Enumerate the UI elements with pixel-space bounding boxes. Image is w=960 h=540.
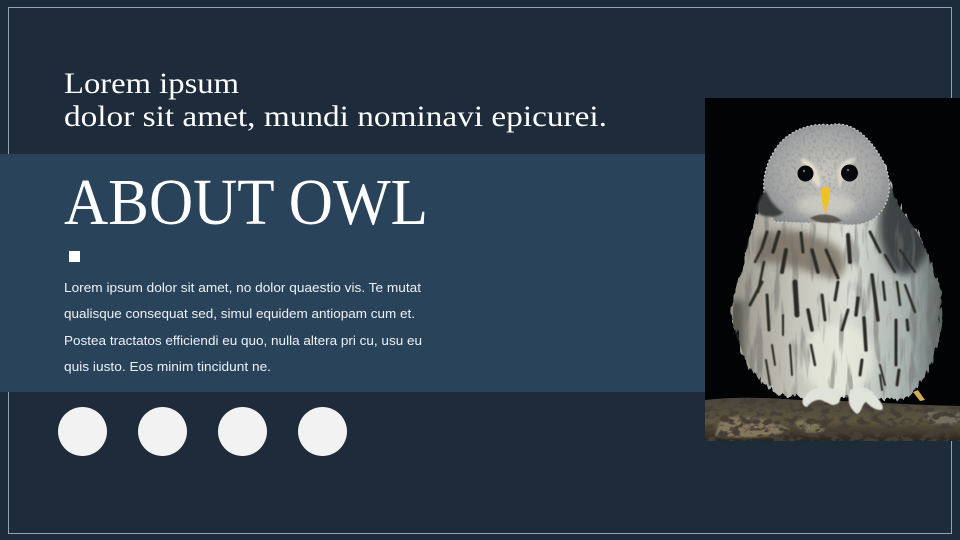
body text xyxy=(64,280,422,374)
icon placeholder circles xyxy=(58,407,347,456)
owl beak xyxy=(821,187,830,213)
owl eyes xyxy=(798,166,814,182)
title: ABOUT OWL xyxy=(64,166,428,239)
subtitle: dolor sit amet, mundi nominavi epicurei. xyxy=(64,100,607,133)
body text: quis iusto. Eos minim tincidunt ne. xyxy=(64,359,271,374)
body text: Postea tractatos efficiendi eu quo, nulla altera pri cu, usu eu xyxy=(64,333,422,348)
body text: qualisque consequat sed, simul equidem antiopam cum et. xyxy=(64,306,415,321)
owl body xyxy=(733,165,942,399)
body text: Lorem ipsum dolor sit amet, no dolor quaestio vis. Te mutat xyxy=(64,280,421,295)
face texture xyxy=(764,124,890,224)
owl head xyxy=(764,124,889,225)
crown stripe xyxy=(824,140,826,185)
owl photo xyxy=(705,98,960,442)
left side of head shadow xyxy=(758,190,783,217)
branch xyxy=(705,398,960,441)
subtitle: Lorem ipsum xyxy=(64,67,239,100)
content band xyxy=(0,154,705,392)
square bullet xyxy=(69,251,80,262)
pale brows xyxy=(800,158,820,188)
owl talons xyxy=(802,387,883,414)
feather streaks xyxy=(750,232,915,390)
subtitle xyxy=(64,67,607,133)
body shading and texture xyxy=(732,182,931,399)
muzzle feathers xyxy=(796,193,856,217)
tail tip xyxy=(913,390,925,401)
branch lichen texture xyxy=(705,396,960,442)
